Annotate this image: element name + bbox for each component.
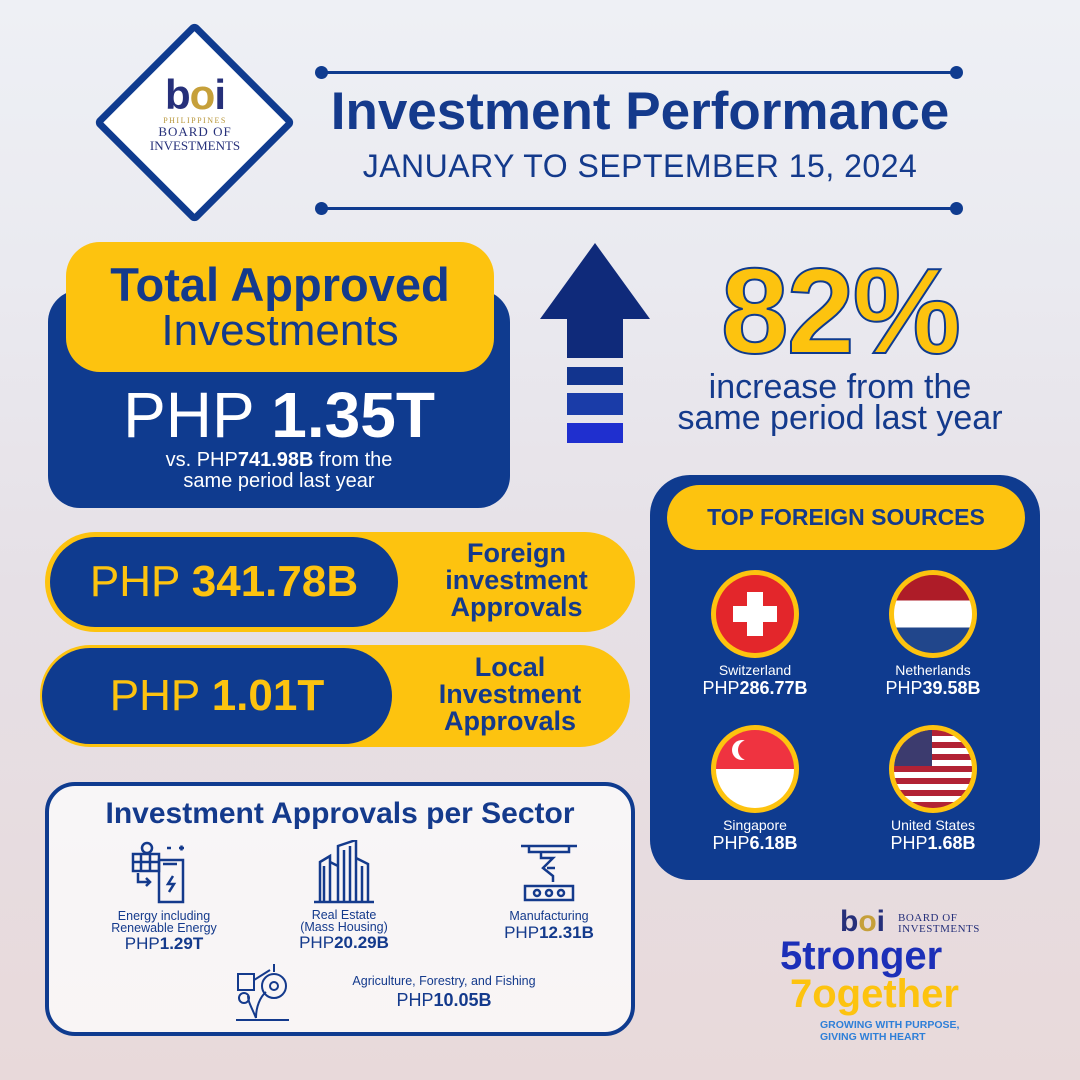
logo: stronger together: INVESTMENTS [898, 923, 980, 935]
panel: total approved investments: same period last year [183, 470, 375, 492]
logo: BOI diamond: BOARD OF [158, 124, 232, 139]
title block [315, 66, 963, 215]
heading pill [66, 242, 494, 372]
sector: energy: Renewable Energy [111, 921, 217, 935]
flag: singapore [711, 725, 799, 853]
logo: BOI diamond: PHILIPPINES [163, 116, 227, 125]
sector: agriculture: PHP10.05B [396, 990, 492, 1010]
flag: switzerland: Switzerland [719, 662, 791, 678]
sector: energy: PHP1.29T [125, 934, 203, 953]
sector: real estate [299, 840, 389, 952]
flag: netherlands [885, 570, 981, 698]
sector: energy: Energy including [118, 909, 210, 923]
logo: stronger together [780, 905, 980, 1043]
heading pill: Total Approved [110, 258, 450, 311]
flag: switzerland [702, 570, 808, 698]
flag: switzerland: PHP286.77B [702, 678, 808, 698]
stat: 82% increase: same period last year [677, 399, 1003, 437]
stat: 82% increase: increase from the [709, 368, 971, 406]
logo: stronger together: GROWING WITH PURPOSE, [820, 1019, 959, 1031]
flag: united states: United States [891, 817, 975, 833]
logo: BOI diamond [96, 24, 294, 222]
panel: local investment approvals: Investment [439, 679, 581, 709]
flag: netherlands: PHP39.58B [885, 678, 981, 698]
panel: top foreign sources [650, 475, 1040, 880]
panel: local investment approvals [40, 645, 630, 747]
icon: up arrow [540, 243, 650, 443]
panel: investment approvals per sector [45, 782, 635, 1036]
heading pill: TOP FOREIGN SOURCES [707, 504, 985, 530]
panel: foreign investment approvals: Foreign [467, 538, 566, 568]
heading: Investment Performance [331, 82, 949, 141]
flag: united states: PHP1.68B [890, 833, 976, 853]
panel: foreign investment approvals [45, 532, 635, 632]
sector: manufacturing [504, 844, 594, 942]
logo: BOI diamond: INVESTMENTS [150, 138, 240, 153]
sector: manufacturing: Manufacturing [509, 909, 589, 923]
panel: local investment approvals: Local [475, 652, 545, 682]
sector: agriculture [236, 964, 536, 1021]
logo: BOI diamond: boi [165, 71, 225, 118]
sector: manufacturing: PHP12.31B [504, 923, 594, 942]
logo: stronger together: BOARD OF [898, 912, 957, 924]
sector: agriculture: Agriculture, Forestry, and Fishing [352, 974, 536, 988]
panel: foreign investment approvals: investment [445, 565, 588, 595]
logo: stronger together: boi [840, 905, 885, 938]
heading: Investment Approvals per Sector [105, 797, 575, 830]
flag: united states [889, 725, 977, 853]
flag: singapore: PHP6.18B [712, 833, 798, 853]
stat: 82% increase [677, 243, 1003, 437]
panel: local investment approvals: PHP 1.01T [110, 671, 324, 720]
flag: netherlands: Netherlands [895, 662, 971, 678]
heading pill [667, 485, 1025, 550]
panel: foreign investment approvals: Approvals [450, 592, 583, 622]
sector: real estate: PHP20.29B [299, 933, 389, 952]
panel: local investment approvals: Approvals [444, 706, 576, 736]
sector: real estate: (Mass Housing) [300, 920, 388, 934]
logo: stronger together: 7ogether [790, 972, 959, 1016]
logo: stronger together: GIVING WITH HEART [820, 1031, 926, 1043]
panel: total approved investments [48, 242, 510, 508]
logo: stronger together: 5tronger [780, 934, 942, 978]
panel: total approved investments: vs. PHP741.98B from the [166, 449, 392, 471]
total value: PHP 1.35T [123, 379, 435, 451]
panel: foreign investment approvals: PHP 341.78B [90, 557, 358, 606]
sector: real estate: Real Estate [312, 908, 376, 922]
flag: singapore: Singapore [723, 817, 787, 833]
subtitle: JANUARY TO SEPTEMBER 15, 2024 [363, 148, 917, 184]
sector: energy [111, 842, 217, 953]
stat: 82% increase: 82% [721, 243, 959, 379]
heading pill: Investments [161, 306, 399, 355]
